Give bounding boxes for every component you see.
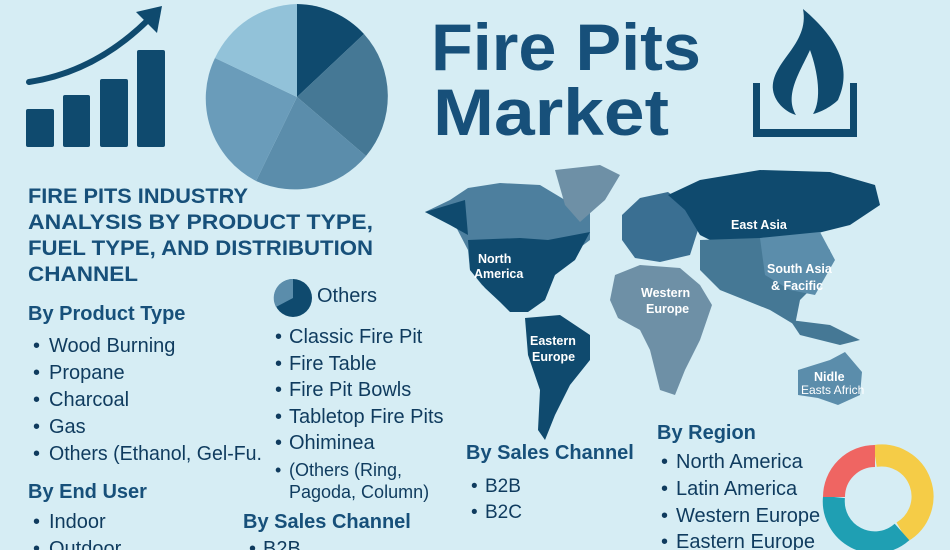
list: by product type & end user: • [33, 416, 40, 438]
list: by product type & end user: Indoor [49, 511, 106, 533]
list: by region: By Region [657, 422, 756, 444]
title [431, 10, 701, 149]
list: product styles: Others [317, 285, 377, 307]
list: by product type & end user [28, 303, 262, 550]
map labels: Europe [532, 350, 575, 364]
heading: industry analysis: FIRE PITS INDUSTRY [28, 185, 248, 208]
list: product styles: • [275, 379, 282, 401]
map labels: Nidle [814, 370, 845, 384]
list: by sales channel: By Sales Channel [466, 442, 634, 464]
list: product styles: • [275, 326, 282, 348]
list: by product type & end user: • [33, 362, 40, 384]
map labels [474, 218, 864, 397]
list: product styles: • [275, 353, 282, 375]
map labels: & Facific [771, 279, 823, 293]
list: product styles: • [275, 406, 282, 428]
map labels: South Asia [767, 262, 833, 276]
list: by region: North America [676, 451, 804, 473]
list: by sales channel [466, 442, 634, 523]
list: product styles: (Others (Ring, [289, 460, 402, 480]
list: by region [657, 422, 820, 550]
title: Fire Pits [431, 10, 701, 84]
heading: industry analysis [28, 185, 373, 286]
list: by sales channel: • [471, 502, 478, 523]
map labels: America [474, 267, 524, 281]
list: by product type & end user: By Product Type [28, 303, 185, 325]
heading: industry analysis: ANALYSIS BY PRODUCT TYPE, [28, 211, 373, 234]
list: by product type & end user: Wood Burning [49, 335, 175, 357]
list: product styles: Tabletop Fire Pits [289, 406, 444, 428]
list: product styles: Classic Fire Pit [289, 326, 423, 348]
map labels: Western [641, 286, 690, 300]
list: by region: Western Europe [676, 505, 820, 527]
list: product styles: By Sales Channel [243, 511, 411, 533]
list: by sales channel: • [471, 476, 478, 497]
list: by product type & end user: • [33, 443, 40, 465]
icon: bar chart with arrow [26, 6, 165, 147]
list: product styles: Fire Table [289, 353, 376, 375]
list: by product type & end user: Gas [49, 416, 86, 438]
map labels: Europe [646, 302, 689, 316]
heading: industry analysis: FUEL TYPE, AND DISTRIBUTION [28, 237, 373, 260]
list: by region: • [661, 478, 668, 500]
list: by region: • [661, 451, 668, 473]
list: by product type & end user: Propane [49, 362, 125, 384]
pie chart [206, 4, 388, 189]
donut chart [834, 455, 923, 542]
list: by product type & end user: • [33, 511, 40, 533]
title: Market [433, 75, 669, 149]
list: product styles: Ohiminea [289, 432, 375, 454]
icon: flame in fire pit [753, 9, 857, 137]
map labels: East Asia [731, 218, 788, 232]
map labels: Eastern [530, 334, 576, 348]
list: by product type & end user: • [33, 389, 40, 411]
list: by product type & end user: • [33, 335, 40, 357]
list: by region: Latin America [676, 478, 798, 500]
list: by sales channel: B2B [485, 476, 521, 497]
list: by product type & end user: Others (Ethanol, Gel-Fu. [49, 443, 262, 465]
list: product styles: Pagoda, Column) [289, 482, 429, 502]
list: by product type & end user: Charcoal [49, 389, 129, 411]
map labels: North [478, 252, 511, 266]
list: product styles: • [275, 432, 282, 454]
list: by product type & end user: By End User [28, 481, 147, 503]
list: by region: • [661, 505, 668, 527]
list: product styles: • [275, 460, 281, 480]
list: product styles: Fire Pit Bowls [289, 379, 411, 401]
world map [425, 165, 880, 440]
list: by sales channel: B2C [485, 502, 522, 523]
map labels: Easts Africh [801, 383, 864, 397]
list: product styles [243, 279, 444, 550]
heading: industry analysis: CHANNEL [28, 263, 138, 286]
